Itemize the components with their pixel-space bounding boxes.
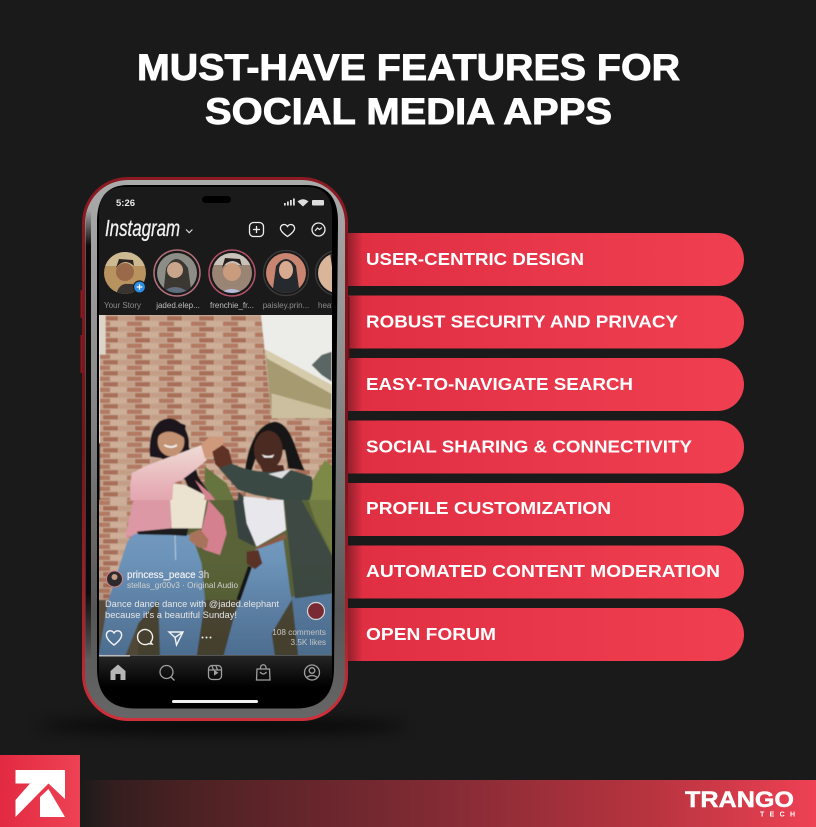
stories row bbox=[104, 250, 360, 310]
story labels bbox=[104, 302, 332, 310]
feature: automated content moderation: AUTOMATED CONTENT MODERATION bbox=[366, 561, 720, 581]
instagram header bbox=[106, 220, 326, 242]
feature list bbox=[347, 233, 744, 661]
video photo bbox=[95, 310, 340, 657]
trango tech wordmark: TECH bbox=[760, 812, 795, 818]
phone mockup bbox=[80, 177, 360, 721]
feature: user-centric design: USER-CENTRIC DESIGN bbox=[366, 249, 584, 269]
feature: automated content moderation bbox=[347, 546, 744, 598]
logo square bbox=[0, 755, 80, 827]
status bar bbox=[116, 196, 324, 206]
story labels: jaded.elep... bbox=[155, 301, 200, 310]
phone body bbox=[80, 177, 350, 721]
feature: easy-to-navigate search: EASY-TO-NAVIGATE SEARCH bbox=[366, 374, 633, 394]
story labels: heat bbox=[318, 301, 334, 310]
trango tech wordmark bbox=[685, 787, 795, 818]
lower bushes bbox=[170, 500, 332, 600]
feature: open forum: OPEN FORUM bbox=[366, 624, 496, 644]
post action icons bbox=[106, 630, 183, 645]
feature: open forum bbox=[347, 608, 744, 661]
caption: Dance dance dance with @jaded.elephant bbox=[105, 599, 279, 609]
right woman lower background bbox=[233, 500, 255, 547]
audio disc bbox=[308, 602, 324, 620]
right woman jacket bbox=[218, 463, 313, 501]
post stats: 3.5K likes bbox=[290, 638, 326, 647]
instagram header: Instagram bbox=[105, 215, 180, 241]
feature: robust security and privacy: ROBUST SECURITY AND PRIVACY bbox=[366, 312, 678, 332]
feature: easy-to-navigate search bbox=[347, 358, 744, 411]
caption bbox=[105, 599, 279, 620]
story: paisley bbox=[264, 250, 308, 296]
post author: princess_peace 3h bbox=[127, 570, 209, 581]
right woman neck bbox=[260, 464, 285, 473]
screen bbox=[99, 187, 332, 703]
left woman belt bbox=[137, 528, 188, 536]
left woman face bbox=[158, 427, 184, 456]
lower photo layer bbox=[95, 500, 338, 657]
left woman sweater bbox=[130, 444, 208, 500]
home indicator bbox=[172, 700, 258, 703]
feature: robust security and privacy bbox=[347, 296, 744, 348]
left woman jeans bbox=[98, 533, 205, 657]
story: your story bbox=[104, 252, 146, 295]
story labels: frenchie_fr... bbox=[210, 301, 254, 310]
status bar: 5:26 bbox=[116, 198, 135, 209]
left woman hand bbox=[189, 529, 208, 548]
phone shadow bbox=[37, 719, 407, 733]
feature: profile customization bbox=[347, 483, 744, 536]
strap bbox=[238, 567, 250, 600]
upper photo layer bbox=[99, 315, 332, 501]
feature: profile customization: PROFILE CUSTOMIZATION bbox=[366, 498, 611, 518]
story: heather bbox=[315, 250, 332, 296]
feature: user-centric design bbox=[347, 233, 744, 286]
story: frenchie bbox=[209, 250, 255, 296]
story labels: Your Story bbox=[104, 301, 141, 310]
caption: because it's a beautiful Sunday! bbox=[105, 610, 237, 620]
feature: social sharing and connectivity bbox=[347, 420, 744, 474]
right woman top lower bbox=[243, 500, 286, 547]
brick chimney bbox=[99, 315, 272, 501]
left woman hair bbox=[150, 418, 212, 497]
bushes bbox=[204, 466, 234, 501]
tree bbox=[312, 352, 332, 382]
right woman belt bbox=[255, 533, 287, 552]
bottom fade bbox=[99, 560, 332, 655]
post stats: 108 comments bbox=[272, 628, 326, 637]
sky bbox=[95, 310, 340, 443]
lower brick bbox=[99, 499, 134, 601]
post stats bbox=[272, 628, 326, 647]
title: MUST-HAVE FEATURES FOR bbox=[137, 46, 680, 88]
roof and soffit bbox=[265, 349, 332, 425]
right woman jeans bbox=[223, 540, 292, 657]
feature: social sharing and connectivity: SOCIAL SHARING & CONNECTIVITY bbox=[366, 436, 692, 456]
left woman shirt bbox=[172, 482, 206, 500]
logo arrow bbox=[16, 770, 65, 817]
left woman lower sweater bbox=[125, 500, 172, 538]
right woman jacket lower bbox=[284, 500, 332, 598]
nav icons bbox=[110, 664, 126, 680]
right woman hand bbox=[212, 445, 232, 471]
title: SOCIAL MEDIA APPS bbox=[205, 90, 612, 132]
post author: stellas_gr00v3 · Original Audio bbox=[127, 581, 238, 590]
right woman hair bbox=[245, 422, 305, 471]
footer bar bbox=[80, 780, 816, 827]
left woman hands bbox=[201, 437, 224, 458]
story: jaded bbox=[154, 250, 200, 296]
bottom navigation bbox=[99, 655, 332, 708]
right woman hand lower bbox=[247, 550, 262, 569]
trango tech wordmark: TRANGO bbox=[685, 787, 794, 812]
story labels: paisley.prin... bbox=[263, 301, 309, 310]
right woman top bbox=[242, 496, 268, 500]
right woman face bbox=[254, 431, 283, 469]
post author bbox=[106, 570, 238, 590]
rear brick wall bbox=[271, 418, 332, 501]
title bbox=[137, 46, 680, 132]
left woman lower shirt bbox=[170, 500, 207, 528]
